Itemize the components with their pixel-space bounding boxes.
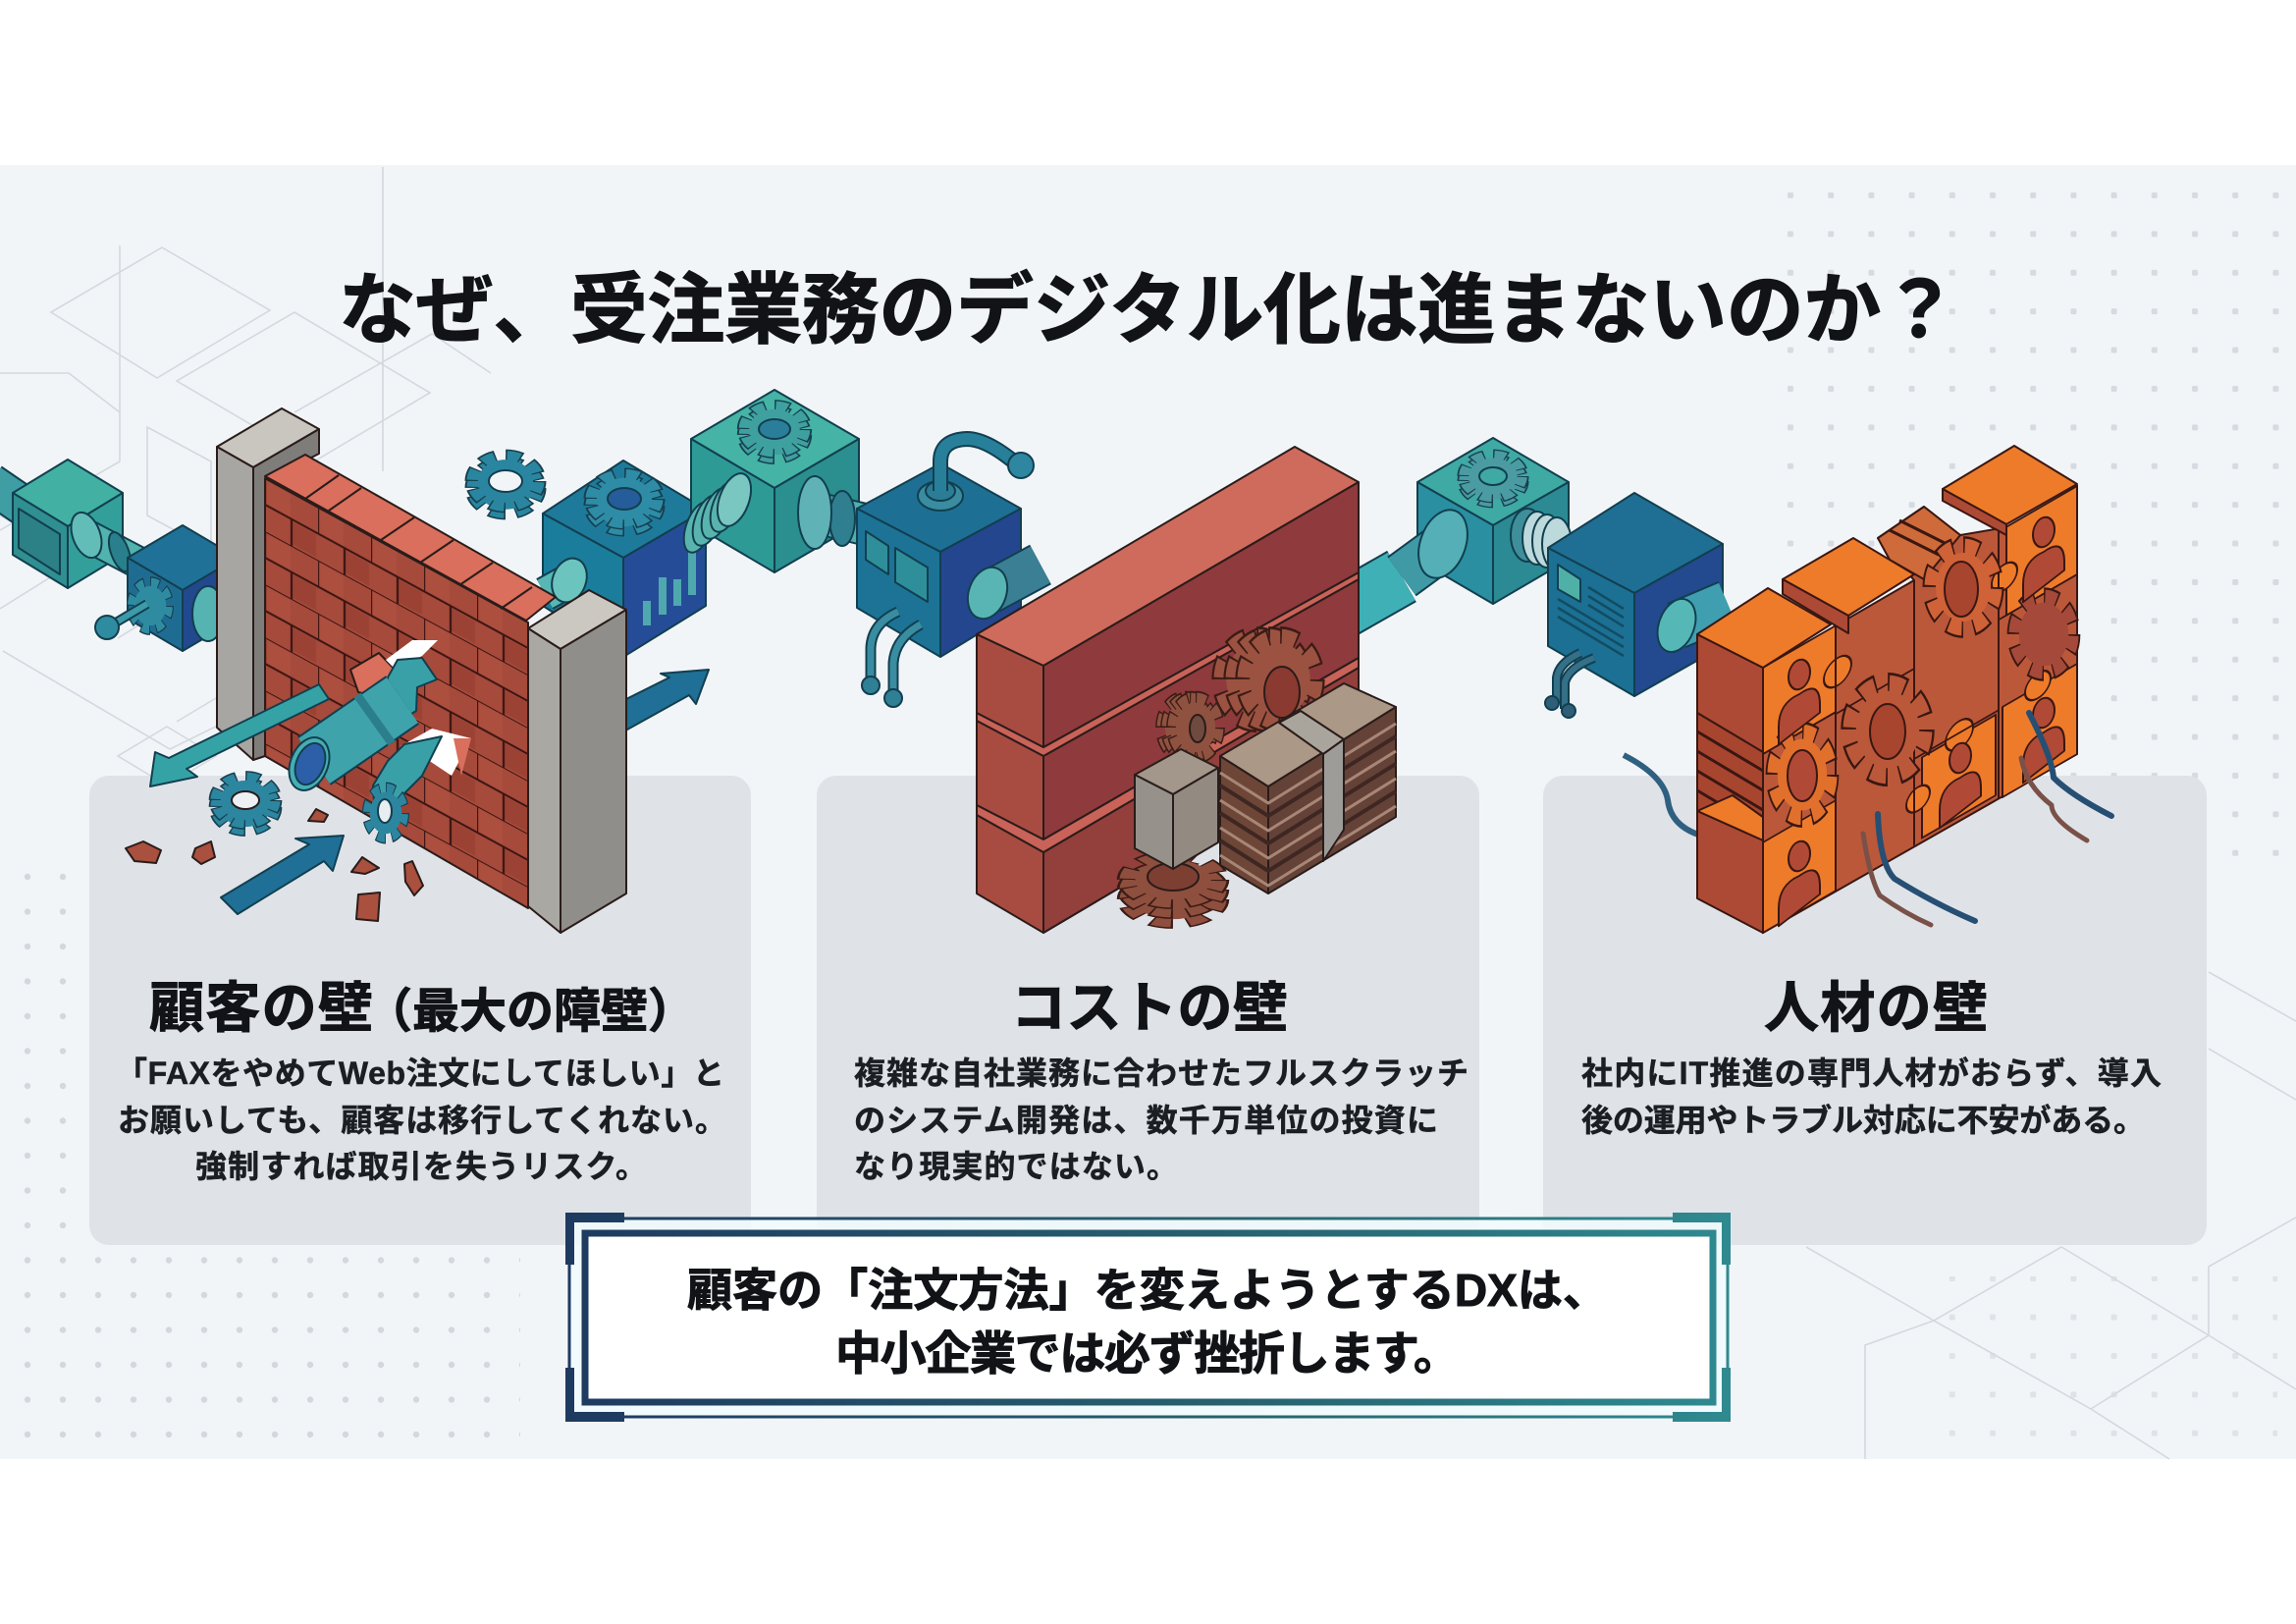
text: callout message: 中小企業では必ず挫折します。 [835,1327,1460,1380]
icon: teal cube with screen [13,460,123,588]
icon: floating gear [473,456,538,514]
text block: customer wall body: お願いしても、顧客は移行してくれない。 [118,1103,726,1138]
text block: customer wall body [116,1056,726,1184]
block: left faces [1697,634,1767,933]
icon: large rusty gear [1221,637,1315,722]
pipe: cost wall to teal cube [1345,503,1476,609]
icon: blue cube with lever [95,525,238,651]
illustration: people wall puzzle [1624,446,2111,936]
pipe: document cube to people wall [1651,594,1728,657]
panel text: people wall [1581,977,2162,1138]
pipe: teal cube to blue cube [798,476,869,549]
icon: blue cube with bar chart [543,460,706,657]
icon: teal cube with gear [691,390,859,572]
title: なぜ、受注業務のデジタル化は進まないのか？ [339,266,1958,353]
heading: cost wall: コストの壁 [1011,977,1288,1039]
icon: small gear [216,777,275,831]
text: callout message: 顧客の「注文方法」を変えようとするDXは、 [687,1265,1608,1316]
text block: people wall body: 社内にIT推進の専門人材がおらず、導入 [1581,1056,2162,1091]
heading: customer wall: （最大の障壁） [365,986,695,1038]
icon: blue cube with document [1545,493,1723,718]
wall: brick top [265,455,556,621]
icon: brick shards [126,809,423,921]
icon: blue cube with gooseneck and meters [857,439,1034,707]
wire: left blue [1624,755,1698,835]
wall: row one [977,447,1359,756]
wire: blue and brown cables [1863,713,2111,925]
panel: customer wall background [89,776,751,1245]
text block: people wall body [1581,1056,2162,1138]
heading: customer wall [149,977,695,1039]
wall: brick front [265,478,528,908]
text block: customer wall body: 強制すれば取引を失うリスク。 [195,1149,647,1184]
pipe: blue cube to cost wall [961,562,1041,624]
icon: teal cube with gear [1417,438,1569,604]
pipe: chart cube to teal cube [678,469,758,557]
text block: customer wall body: 「FAXをやめてWeb注文にしてほしい」と [116,1056,724,1091]
wall: hole and debris [350,640,471,820]
arrow: blue arrow passing behind wall [618,670,709,734]
callout: conclusion box [565,1213,1731,1422]
icon: money stack [1220,683,1396,893]
heading: customer wall: 顧客の壁 [149,977,373,1039]
text block: cost wall body: のシステム開発は、数千万単位の投資に [854,1103,1438,1138]
text block: people wall body: 後の運用やトラブル対応に不安がある。 [1581,1103,2145,1138]
pipe: between first two units [66,509,142,574]
icon: small rusty gear [1161,698,1219,757]
wall: row two [977,579,1359,852]
panel text: cost wall [854,977,1468,1184]
icon: broken pipe [282,700,402,796]
icon: bottom rusty gear [1128,856,1218,923]
block: front face with puzzle pieces [1763,486,2077,936]
icon: broken gear [367,788,404,838]
text block: cost wall body: 複雑な自社業務に合わせたフルスクラッチ [854,1056,1468,1091]
illustration: right pipeline units [1345,438,1728,718]
text: callout message [687,1265,1608,1380]
illustration: cost wall [977,447,1396,933]
wall: row three [977,668,1359,933]
pillar: left concrete [217,408,319,760]
pipe: entering from left [0,483,27,509]
panel text: customer wall [116,977,726,1184]
pipe: wall to chart cube [545,554,593,607]
icon: puzzle gears [1773,507,2073,817]
icon: grey block [1135,749,1218,869]
illustration: breached brick wall [126,408,709,933]
panel: cost wall background [817,776,1479,1245]
text block: cost wall body: なり現実的ではない。 [854,1149,1178,1184]
pipe: teal cube to document cube [1511,509,1572,570]
heading: people wall: 人材の壁 [1764,977,1988,1039]
text block: cost wall body [854,1056,1468,1184]
pillar: right concrete [528,590,626,933]
arrow: blue arrow up right [221,836,344,914]
icon: people silhouettes [1779,513,2064,926]
block: top faces [1697,446,2077,668]
illustration: left pipeline units [0,460,238,651]
panel: people wall background [1543,776,2207,1245]
illustration: middle pipeline units [473,390,1041,707]
arrow: teal left arrow [150,684,329,786]
